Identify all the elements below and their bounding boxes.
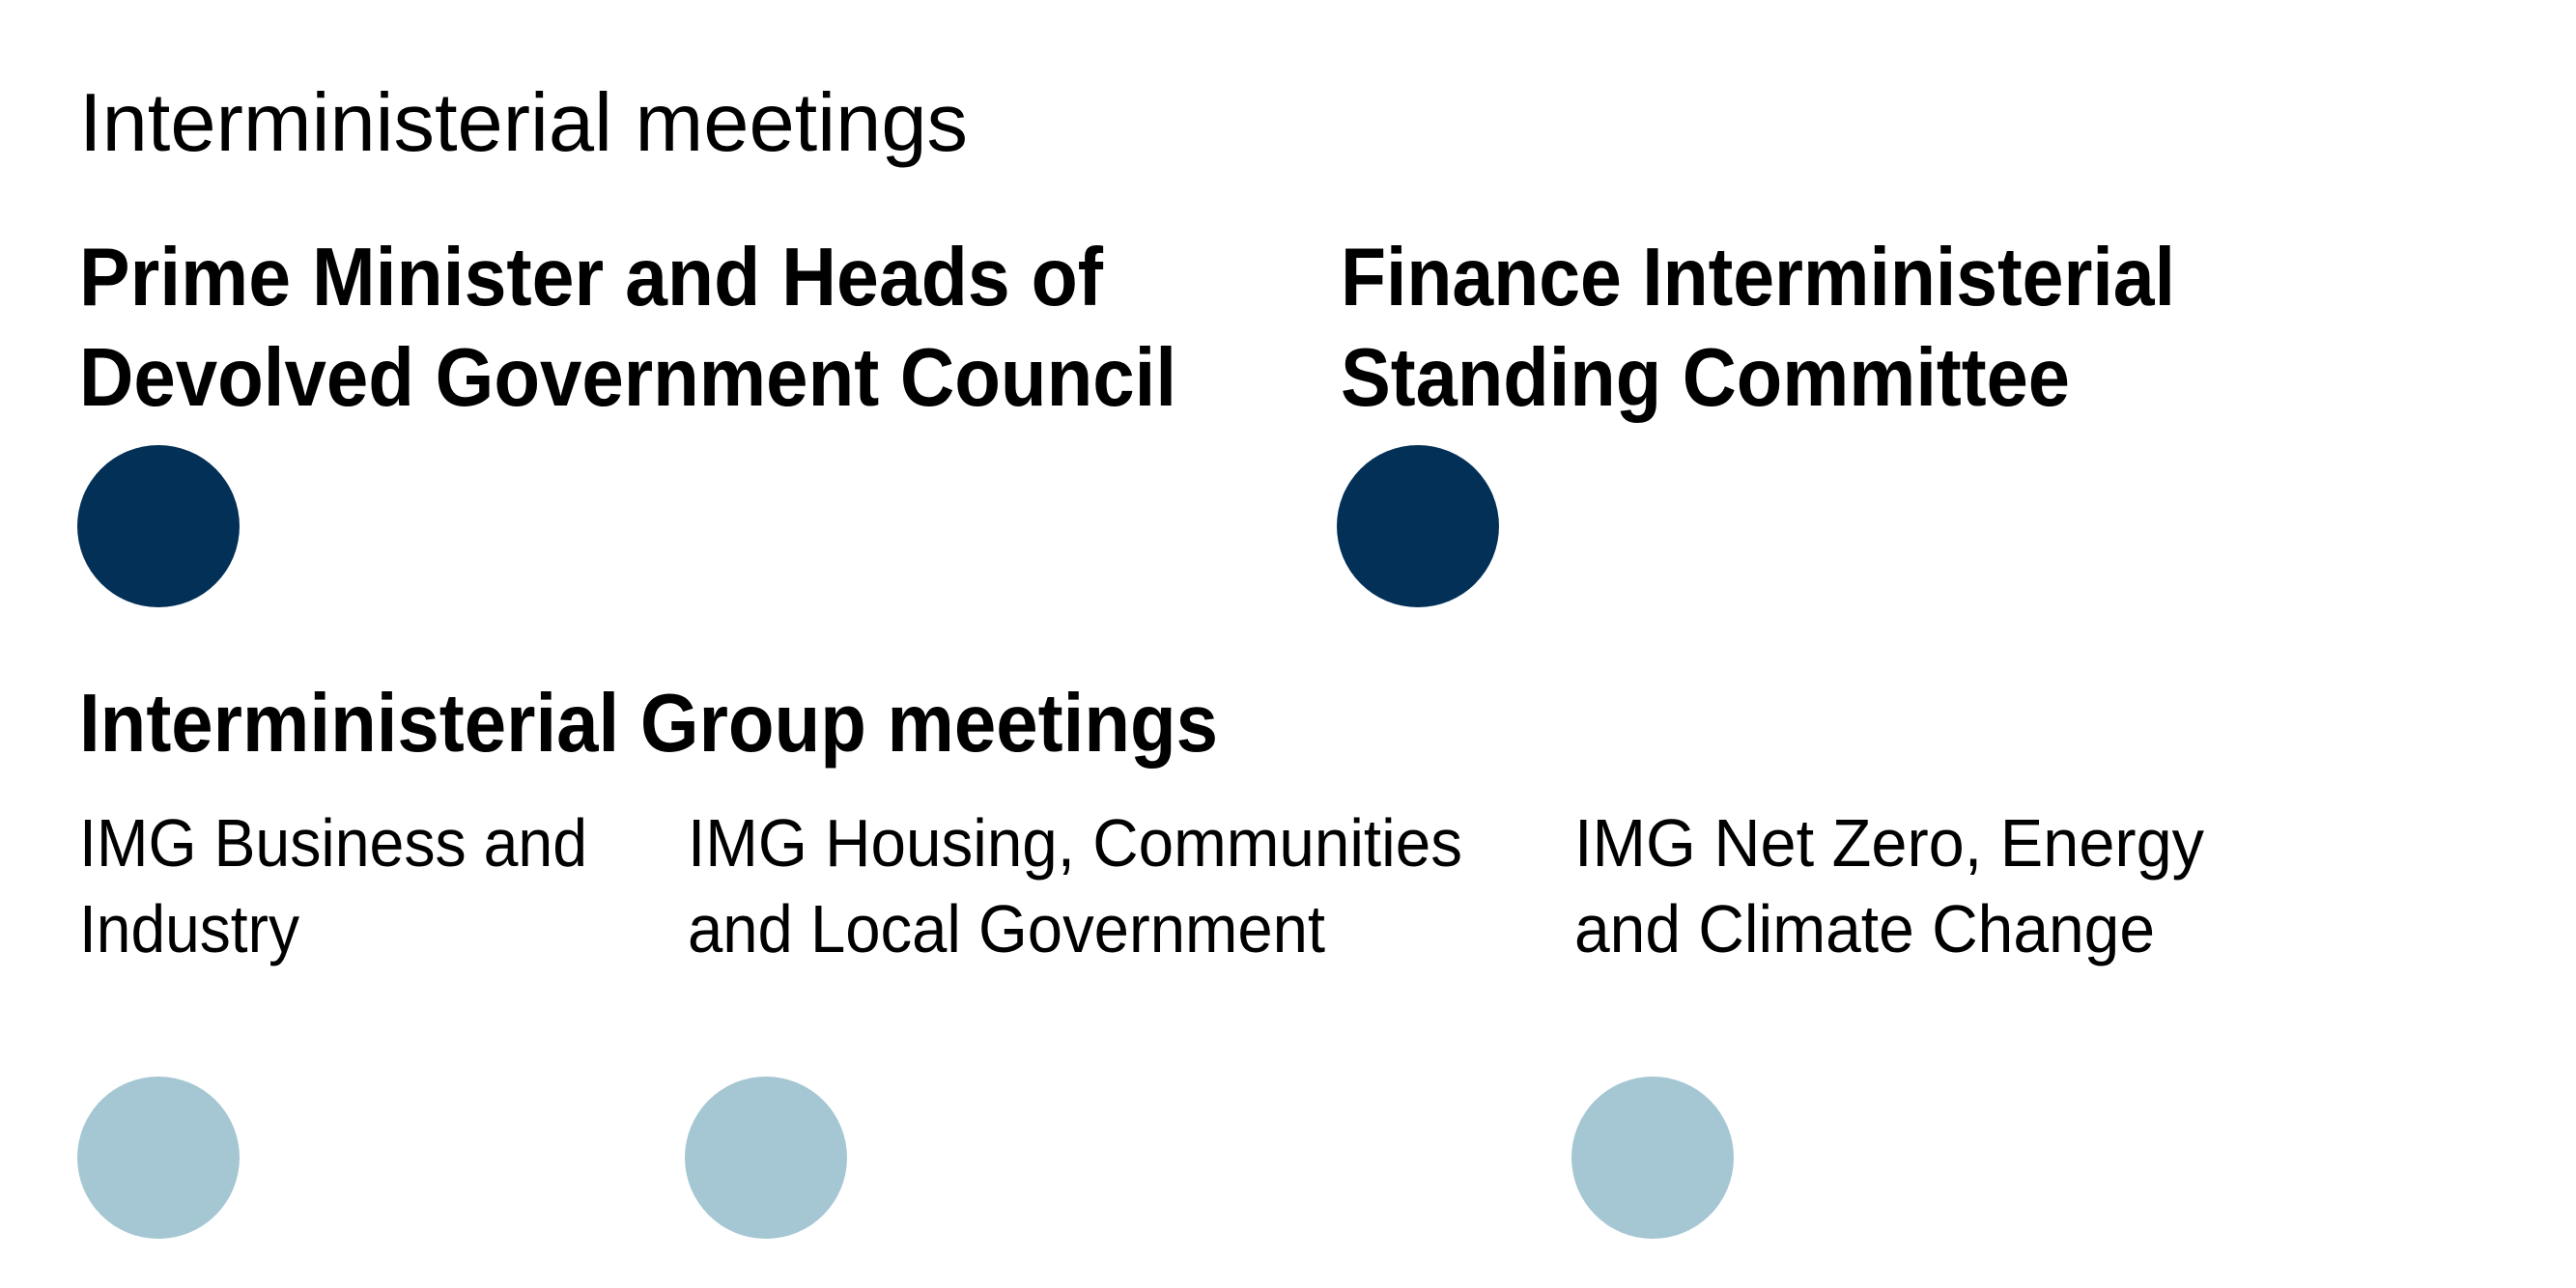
heading: finance committee	[1341, 232, 2175, 424]
label: business: IMG Business and	[79, 805, 587, 881]
heading: PM council: Prime Minister and Heads of	[79, 232, 1104, 323]
heading: PM council: Devolved Government Council	[79, 332, 1176, 424]
icon: light circle	[685, 1077, 847, 1239]
label: net zero: IMG Net Zero, Energy	[1574, 805, 2204, 881]
panel: IMG net zero	[1571, 805, 2204, 1239]
label: business	[79, 805, 587, 966]
icon: dark circle	[1337, 445, 1499, 607]
icon: dark circle	[77, 445, 240, 607]
label: business: Industry	[79, 891, 299, 966]
title: Interministerial meetings	[79, 77, 968, 169]
panel: IMG housing	[685, 805, 1462, 1239]
heading: PM council	[79, 232, 1176, 424]
label: net zero	[1574, 805, 2204, 966]
icon: light circle	[77, 1077, 240, 1239]
label: housing	[688, 805, 1462, 966]
heading: finance committee: Finance Interministerial	[1341, 232, 2175, 323]
panel: finance committee	[1337, 232, 2175, 607]
label: net zero: and Climate Change	[1574, 891, 2155, 966]
panel: IMG business	[77, 805, 587, 1239]
icon: light circle	[1571, 1077, 1734, 1239]
heading: finance committee: Standing Committee	[1341, 332, 2070, 424]
label: housing: IMG Housing, Communities	[688, 805, 1462, 881]
heading: IMG meetings: Interministerial Group meetings	[79, 678, 1218, 770]
label: housing: and Local Government	[688, 891, 1325, 966]
panel: PM and heads council	[77, 232, 1176, 607]
